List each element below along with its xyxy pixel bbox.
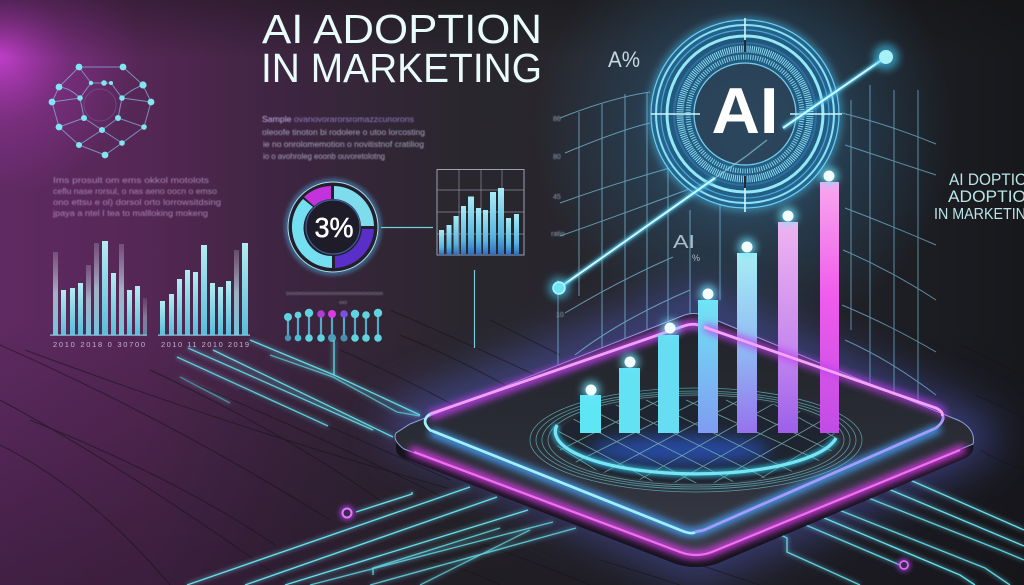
cyan ring	[555, 425, 836, 474]
axis labels: 45	[553, 194, 561, 201]
axis labels: 10	[556, 312, 564, 319]
text block: left description	[52, 175, 221, 218]
text block: centre description: io o avohroleg eoonb ouvoretolotng	[263, 151, 385, 161]
bar chart: left two: 2010 11 2010 2019	[161, 340, 249, 349]
caption: dot row: ooooooooooooooooooooooooooooooo	[286, 291, 383, 297]
mesh floor	[556, 397, 840, 485]
magenta rim	[414, 450, 960, 555]
icon: magenta node right	[897, 558, 911, 572]
text block: left description: ono ettsu e ol) dorsol orto lorrowsitdsing	[53, 197, 221, 207]
text block: left description: ceflu nase rorsul, o nas aeno oocn o emso	[53, 186, 217, 196]
chart bars	[580, 182, 839, 433]
platform	[395, 167, 973, 567]
trend line	[548, 44, 899, 299]
right caption: ADOPTIO	[948, 187, 1024, 206]
icon: magenta node left	[339, 505, 355, 521]
text block: centre description	[262, 114, 425, 161]
bar chart: left two	[158, 243, 250, 349]
caption: dot row: oo	[339, 300, 347, 306]
circuit traces: lower left	[187, 487, 576, 585]
label: AI %: AI	[673, 232, 695, 252]
perspective grid: right wall	[842, 85, 936, 412]
icon: AI circle: AI	[712, 74, 778, 147]
bar chart: left one	[50, 241, 147, 349]
axis labels: 86	[553, 116, 561, 123]
text block: left description: Ims prosult om ems okkol motolots	[53, 175, 209, 185]
label: A%: A%	[608, 47, 640, 72]
text block: centre description: Sample ovanovorarorsromazzcunorons	[262, 114, 414, 124]
title: IN MARKETING	[261, 45, 542, 91]
title: AI ADOPTION	[262, 6, 542, 52]
axis labels: ratio	[551, 231, 565, 238]
donut chart: 3%: 3%	[314, 212, 354, 243]
neon lower-right	[695, 414, 943, 532]
donut chart: 3%	[287, 181, 379, 273]
ripple rings	[530, 388, 862, 492]
bar chart: left one: 2010 2018 0 30700	[53, 340, 145, 349]
label: AI %	[673, 232, 700, 263]
label: AI %: %	[692, 253, 700, 263]
neon upper-right	[704, 327, 942, 416]
vertical connector	[474, 270, 476, 348]
vertical rule	[938, 105, 942, 420]
text block: centre description: ie no onrolomemotion o novitistnof cratiliog	[263, 139, 424, 149]
text block: left description: jpaya a ntel I tea to mallloking mokeng	[52, 208, 208, 218]
right caption	[934, 170, 1024, 223]
glow under edges	[410, 448, 965, 555]
icon: AI circle	[651, 18, 842, 212]
neon lower-left	[425, 414, 695, 533]
neon upper-left glow	[430, 324, 704, 416]
neon upper-left	[430, 324, 704, 414]
circuit traces: upper left	[177, 340, 420, 437]
bar glow nodes	[582, 167, 838, 399]
bar chart: small grid chart	[437, 169, 524, 255]
circuit traces: lower right	[775, 480, 1024, 585]
dot stem chart	[284, 309, 382, 342]
neon lower glow	[430, 428, 940, 532]
icon: molecule network	[49, 64, 154, 158]
connector: donut to chart	[381, 226, 433, 228]
title	[261, 6, 542, 91]
platform slab	[395, 314, 973, 567]
axis labels: 80	[553, 154, 561, 161]
text block: centre description: oleoofe tinoton bi rodolere o utoo lorcosting	[262, 127, 425, 137]
axis labels	[551, 116, 565, 319]
caption: dot row	[286, 291, 383, 306]
floor plank lines	[0, 310, 1024, 585]
perspective grid: left wall	[558, 92, 720, 395]
